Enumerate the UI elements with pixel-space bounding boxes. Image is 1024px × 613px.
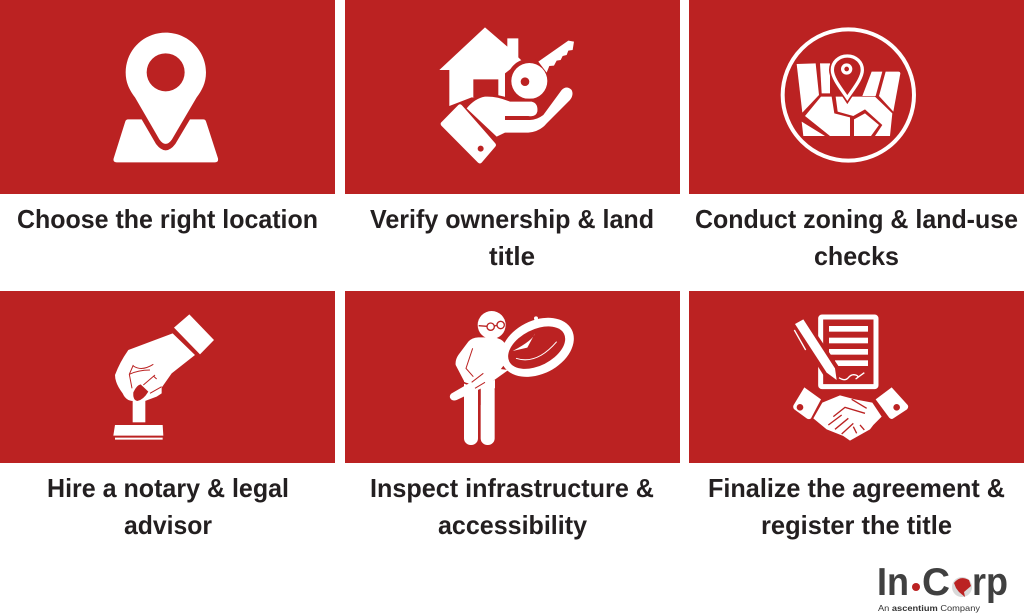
icon: person with magnifying glass: [450, 306, 584, 445]
logo tagline: An ascentium Company: [878, 603, 981, 613]
icon: map in circle: [783, 29, 914, 161]
heading: Choose the right location: [17, 204, 318, 234]
red card: [0, 291, 335, 463]
panel: conduct zoning and land-use checks: [689, 0, 1024, 271]
red card: [689, 291, 1024, 463]
panel: choose the right location: [0, 0, 335, 234]
logo wordmark: In: [877, 561, 909, 604]
red card: [345, 0, 680, 194]
heading: Finalize the agreement &: [708, 473, 1005, 503]
red card: [345, 291, 680, 463]
heading: register the title: [761, 510, 952, 540]
icon: hand with stamp: [113, 314, 214, 440]
heading: checks: [814, 241, 899, 271]
heading: Verify ownership & land: [370, 204, 654, 234]
panel: verify ownership and land title: [345, 0, 680, 271]
panel: hire a notary and legal advisor: [0, 291, 335, 540]
panel: finalize the agreement and register the title: [689, 291, 1024, 540]
heading: advisor: [124, 510, 212, 540]
heading: Conduct zoning & land-use: [695, 204, 1018, 234]
heading: Inspect infrastructure &: [370, 473, 654, 503]
icon: house, key and hand: [439, 27, 577, 163]
heading: accessibility: [438, 510, 588, 540]
red card: [0, 0, 335, 194]
heading: title: [489, 241, 535, 271]
icon: contract, pen and handshake: [792, 317, 908, 441]
logo: InCorp: [877, 561, 1008, 613]
logo letter C: C: [922, 561, 950, 604]
logo red dot: [912, 583, 920, 591]
red card: [689, 0, 1024, 194]
panel: inspect infrastructure and accessibility: [345, 291, 680, 540]
heading: Hire a notary & legal: [47, 473, 289, 503]
icon: map pin: [113, 33, 218, 162]
icon: globe: [952, 577, 972, 597]
logo letters rp: rp: [972, 561, 1008, 604]
